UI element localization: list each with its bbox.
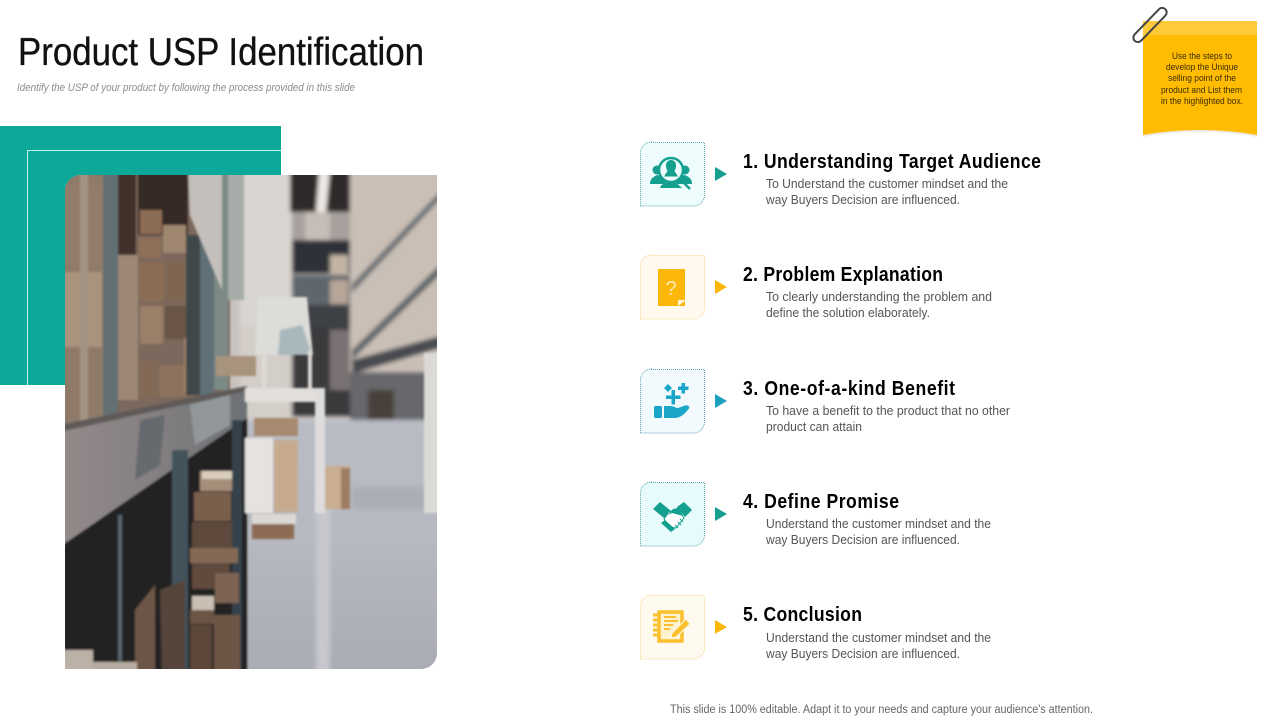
description: product can attain: [766, 419, 862, 434]
title: Product USP Identification: [18, 31, 424, 74]
icon tile: problem document: [640, 255, 704, 319]
note text: develop the Unique: [1166, 62, 1238, 72]
step 2: [640, 255, 992, 320]
heading: 2. Problem Explanation: [743, 263, 943, 285]
teal backdrop panel: [0, 126, 281, 385]
icon tile: problem document: ?: [665, 278, 677, 300]
step 5: [640, 595, 991, 661]
icon tile: handshake: [640, 482, 704, 546]
description: Understand the customer mindset and the: [766, 516, 991, 531]
step 3: [640, 369, 1011, 434]
description: way Buyers Decision are influenced.: [765, 192, 960, 207]
note text: product and List them: [1161, 85, 1242, 95]
icon tile: notepad and pencil: [640, 595, 704, 659]
note text: [1161, 51, 1243, 106]
heading: 1. Understanding Target Audience: [743, 150, 1041, 172]
step 1: [640, 142, 1041, 207]
description: To clearly understanding the problem and: [766, 289, 992, 304]
description: Understand the customer mindset and the: [766, 630, 991, 645]
arrow: [715, 620, 727, 634]
icon tile: target audience: [640, 142, 704, 206]
heading: 3. One-of-a-kind Benefit: [743, 377, 956, 399]
description: To have a benefit to the product that no other: [766, 403, 1011, 418]
description: To Understand the customer mindset and the: [766, 176, 1008, 191]
description: [765, 516, 991, 547]
arrow: [715, 507, 727, 521]
arrow: [715, 280, 727, 294]
description: [765, 630, 991, 661]
description: way Buyers Decision are influenced.: [765, 532, 960, 547]
sticky note: [1143, 21, 1257, 136]
description: [766, 403, 1011, 434]
footer note: This slide is 100% editable. Adapt it to your needs and capture your audience's attention.: [670, 704, 1093, 716]
heading: 5. Conclusion: [743, 603, 862, 625]
arrow: [715, 167, 727, 181]
icon tile: benefit hand: [640, 369, 704, 433]
step 4: [640, 482, 991, 547]
warehouse photo: [55, 160, 447, 680]
note text: selling point of the: [1168, 73, 1236, 83]
description: way Buyers Decision are influenced.: [765, 646, 960, 661]
note text: in the highlighted box.: [1161, 96, 1243, 106]
icon: paperclip: [1131, 6, 1169, 44]
note text: Use the steps to: [1172, 51, 1232, 61]
arrow: [715, 394, 727, 408]
description: [766, 289, 992, 320]
description: define the solution elaborately.: [766, 305, 930, 320]
heading: 4. Define Promise: [743, 490, 899, 512]
subtitle: Identify the USP of your product by following the process provided in this slide: [17, 82, 355, 94]
description: [765, 176, 1008, 207]
